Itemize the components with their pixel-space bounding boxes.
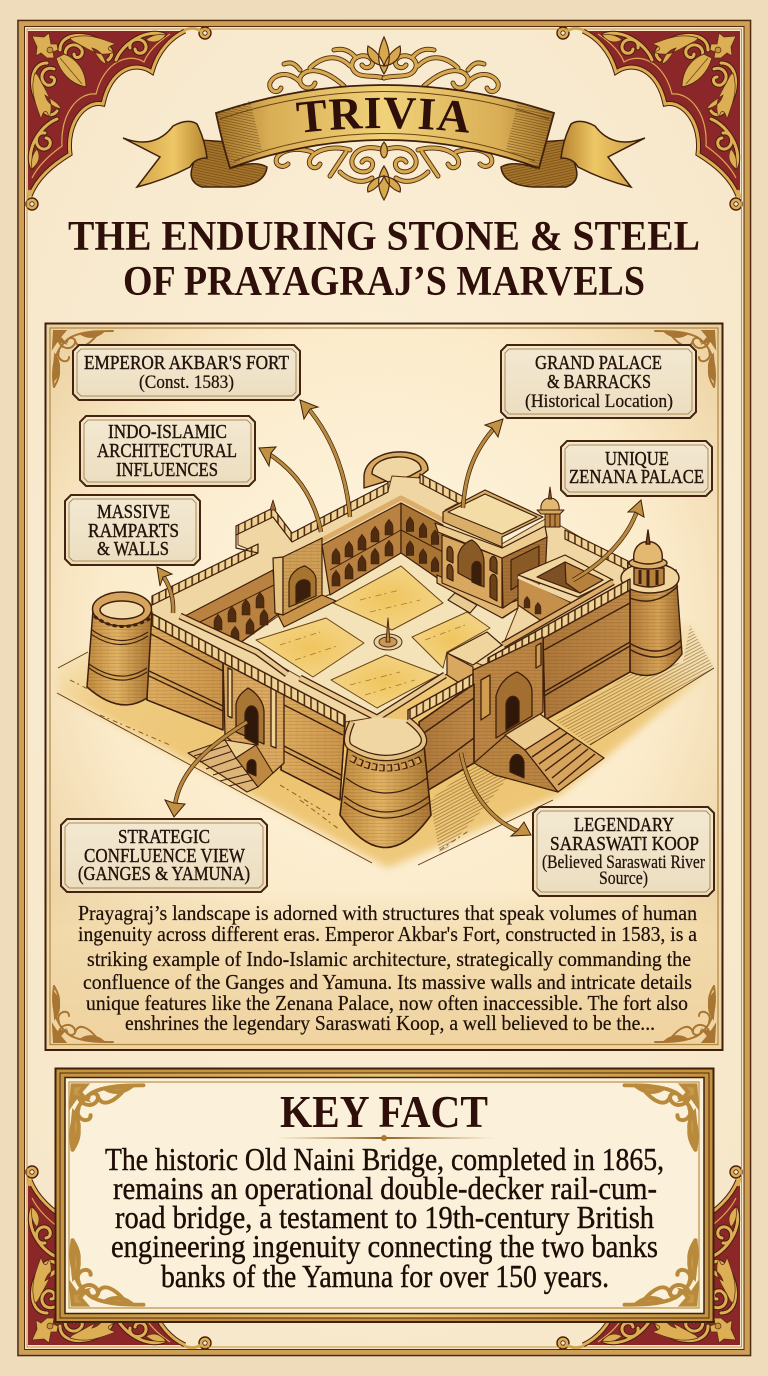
- zenana palace pit and building: [518, 555, 613, 620]
- back right battlement: [565, 530, 628, 570]
- label: Emperor Akbar's Fort: EMPEROR AKBAR'S FORT: [84, 352, 289, 374]
- description paragraph: [78, 901, 698, 1035]
- label: Emperor Akbar's Fort: [73, 345, 300, 400]
- arrow: to confluence view: [165, 722, 247, 817]
- left tower: [87, 592, 152, 705]
- panel: key fact: [56, 1068, 714, 1322]
- ground outline and shadows: [57, 625, 714, 865]
- label: Grand palace and barracks: [501, 345, 696, 418]
- label: Legendary Saraswati Koop: SARASWATI KOOP: [550, 833, 699, 855]
- illustration: isometric fort: [57, 452, 714, 868]
- ground patch: [58, 620, 714, 868]
- label: Strategic confluence view: [61, 819, 267, 892]
- back tower: [364, 452, 428, 488]
- arrow: to massive ramparts: [157, 567, 173, 613]
- key fact body text: engineering ingenuity connecting the two banks: [111, 1228, 658, 1264]
- left arcades: [183, 498, 443, 643]
- key fact heading: KEY FACT: [280, 1086, 488, 1137]
- right gatehouse: [473, 637, 543, 763]
- label: Strategic confluence view: (GANGES & YAMUNA): [78, 863, 250, 885]
- key fact body text: The historic Old Naini Bridge, completed in 1865,: [105, 1141, 664, 1177]
- label: Indo-Islamic influences: INFLUENCES: [116, 459, 218, 481]
- ribbon banner with TRIVIA: [122, 36, 646, 201]
- label: Legendary Saraswati Koop: [533, 807, 714, 896]
- label: Legendary Saraswati Koop: Source): [599, 868, 648, 889]
- label: Legendary Saraswati Koop: LEGENDARY: [574, 814, 674, 836]
- corner ornament: top left: [26, 27, 211, 210]
- label: Indo-Islamic influences: INDO-ISLAMIC: [108, 421, 227, 443]
- ribbon left tail: [123, 121, 267, 187]
- right stairs: [474, 714, 604, 792]
- courtyard floor: [240, 553, 518, 717]
- label: Strategic confluence view: CONFLUENCE VIEW: [84, 845, 245, 867]
- inner parapets: [180, 582, 613, 718]
- arrow: to Emperor Akbar's Fort: [300, 400, 350, 517]
- label: Emperor Akbar's Fort: (Const. 1583): [139, 372, 234, 393]
- palace steps: [448, 593, 477, 613]
- label: Unique Zenana palace: [561, 441, 712, 496]
- panel corner filigree: [53, 331, 715, 1042]
- garden plots: [256, 566, 490, 708]
- ornament: scrolls above banner: [270, 37, 498, 92]
- description paragraph: enshrines the legendary Saraswati Koop, a well believed to be the...: [125, 1011, 655, 1035]
- main title: [68, 213, 700, 305]
- key fact body text: remains an operational double-decker rail-cum-: [113, 1170, 657, 1206]
- label: Massive ramparts and walls: & WALLS: [97, 538, 169, 560]
- panel: fort illustration and description: [46, 324, 722, 1050]
- label: Unique Zenana palace: ZENANA PALACE: [569, 466, 704, 488]
- key fact body text: [105, 1141, 664, 1294]
- inner gate on left arcade: [273, 538, 336, 627]
- plot texture: [280, 590, 465, 695]
- label: Massive ramparts and walls: [65, 495, 200, 565]
- label: Unique Zenana palace: UNIQUE: [605, 448, 669, 470]
- label: Grand palace and barracks: GRAND PALACE: [535, 352, 662, 374]
- description paragraph: Prayagraj’s landscape is adorned with structures that speak volumes of human: [78, 901, 697, 925]
- main title: THE ENDURING STONE & STEEL: [68, 213, 700, 260]
- label: Grand palace and barracks: (Historical Location): [525, 391, 673, 412]
- arrow: to Indo-Islamic influences: [259, 447, 321, 532]
- label: Indo-Islamic influences: [80, 416, 255, 486]
- arrow: to grand palace: [463, 419, 503, 508]
- label: Strategic confluence view: STRATEGIC: [118, 826, 210, 848]
- arrow: to Saraswati Koop: [461, 753, 531, 836]
- label: Grand palace and barracks: & BARRACKS: [547, 371, 651, 393]
- arrow: to Zenana palace: [573, 500, 644, 580]
- front tower: [340, 717, 431, 848]
- left gatehouse: [223, 655, 284, 773]
- label: Massive ramparts and walls: MASSIVE: [97, 501, 170, 523]
- main title: OF PRAYAGRAJ’S MARVELS: [123, 258, 645, 305]
- right tower: [621, 530, 682, 675]
- key fact body text: banks of the Yamuna for over 150 years.: [161, 1258, 609, 1294]
- palace block: [435, 490, 547, 618]
- key fact body text: road bridge, a testament to 19th-century British: [115, 1199, 654, 1235]
- front battlements on left wall: [147, 611, 345, 727]
- label: Indo-Islamic influences: ARCHITECTURAL: [97, 440, 237, 462]
- fort top surface: [147, 476, 632, 722]
- small dome: [537, 487, 564, 527]
- description paragraph: unique features like the Zenana Palace, now often inaccessible. The fort also: [86, 991, 688, 1015]
- key fact corner filigree: [71, 1085, 697, 1305]
- heading divider: [275, 1135, 495, 1141]
- left stairs: [188, 740, 273, 792]
- corner ornament: top right: [557, 27, 742, 210]
- corner ornament: bottom right: [557, 1166, 742, 1349]
- fountain: [374, 618, 402, 650]
- front right wall: [408, 674, 474, 792]
- corner ornament: bottom left: [26, 1166, 211, 1349]
- right corner block: [447, 632, 502, 692]
- description paragraph: striking example of Indo-Islamic architecture, strategically commanding the: [87, 947, 691, 971]
- left curtain wall: [147, 618, 345, 800]
- ribbon right tail: [501, 121, 645, 187]
- ornament: scrolls below banner: [276, 142, 492, 200]
- description paragraph: ingenuity across different eras. Emperor Akbar's Fort, constructed in 1583, is a: [78, 922, 698, 946]
- finial on wall: [270, 500, 276, 510]
- label: Legendary Saraswati Koop: (Believed Saraswati River: [542, 852, 706, 873]
- banner title text: TRIVIA: [296, 98, 469, 133]
- ribbon main band: [216, 85, 554, 168]
- description paragraph: confluence of the Ganges and Yamuna. Its massive walls and intricate details: [83, 970, 692, 994]
- label: Massive ramparts and walls: RAMPARTS: [88, 520, 179, 542]
- right curtain wall: [488, 579, 630, 720]
- back battlements: [152, 474, 464, 605]
